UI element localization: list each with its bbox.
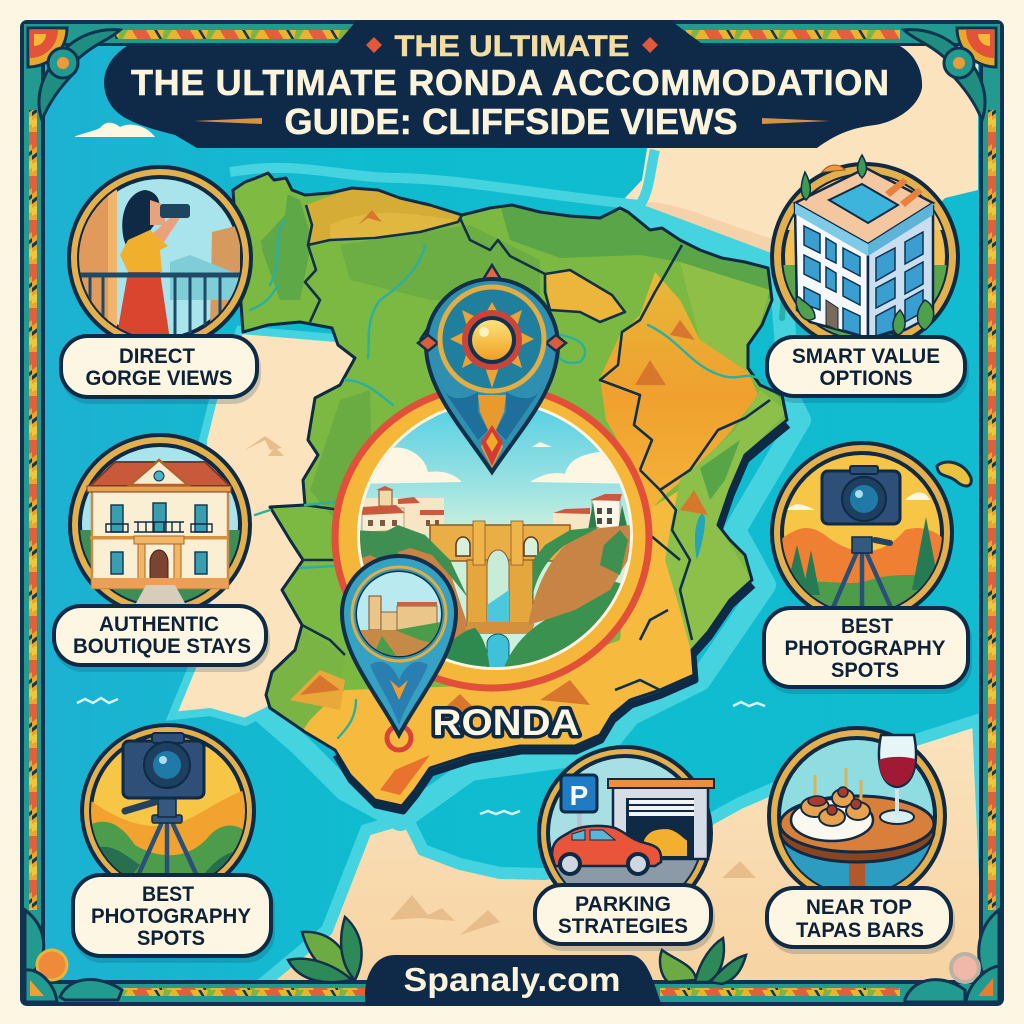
label: parking strategies: PARKING: [575, 893, 671, 916]
land: Portugal: [172, 330, 360, 722]
feature: best photography spots left: [73, 725, 271, 956]
feature: smart value options: [767, 155, 965, 396]
land: France coast shading: [636, 202, 780, 272]
title line 1: THE ULTIMATE: [394, 30, 630, 63]
footer website pill: [365, 955, 662, 1006]
feature: best photography spots right: [764, 443, 968, 687]
internal region borders: [302, 205, 770, 690]
label: authentic boutique stays: BOUTIQUE STAYS: [73, 635, 251, 658]
label: best photography spots right: [764, 608, 968, 687]
icon: ronda pin: [342, 556, 456, 735]
label: near top tapas bars: TAPAS BARS: [796, 919, 924, 942]
icon: tapas and red wine: [769, 728, 945, 904]
icon: sun compass pin: [418, 265, 566, 472]
medallion rings: [335, 386, 649, 688]
top-left corner ornament: [28, 28, 120, 120]
bridge: [430, 521, 570, 670]
label: best photography spots left: SPOTS: [137, 927, 205, 950]
icon: target ring: [387, 726, 411, 750]
top sea glow: [230, 150, 655, 205]
lake: [695, 514, 705, 560]
leaves at bottom: [288, 917, 746, 984]
label: best photography spots left: [73, 875, 271, 956]
sand hills: [245, 436, 756, 935]
label: best photography spots left: BEST: [142, 883, 194, 906]
icon: camera on tripod, orange hills: [772, 443, 952, 623]
bottom-right corner ornament: [905, 910, 999, 1002]
spain land: [234, 175, 786, 804]
town left: [362, 486, 444, 534]
icon: camera on tripod, green hills: [80, 723, 256, 873]
island: [937, 462, 971, 486]
spain outline: [233, 173, 787, 806]
icon: parking garage and cars: P: [570, 780, 588, 811]
label: authentic boutique stays: [54, 606, 266, 665]
label: direct gorge views: DIRECT: [119, 345, 195, 368]
diamonds: [366, 37, 658, 53]
land: France: [625, 46, 978, 300]
feature: parking strategies: [535, 747, 714, 944]
title line 2: THE ULTIMATE RONDA ACCOMMODATION: [131, 62, 889, 103]
icon: boutique villa: [70, 435, 250, 615]
label: best photography spots right: BEST: [841, 615, 893, 638]
label: best photography spots right: SPOTS: [831, 659, 899, 682]
icon: parking garage and cars: [537, 745, 715, 886]
label: near top tapas bars: NEAR TOP: [806, 896, 912, 919]
ronda label: RONDA: [432, 702, 580, 743]
terrain peaks: [300, 210, 708, 712]
central ronda medallion: [335, 386, 649, 688]
label: near top tapas bars: [767, 888, 951, 947]
title banner: [104, 20, 922, 148]
icon: woman photographing from balcony: [69, 167, 251, 349]
spain coast shadow: [336, 425, 788, 811]
label: best photography spots left: PHOTOGRAPHY: [91, 905, 251, 928]
label: best photography spots right: PHOTOGRAPHY: [784, 637, 946, 660]
label: direct gorge views: GORGE VIEWS: [86, 367, 232, 390]
cloud: [74, 123, 155, 137]
label: smart value options: SMART VALUE: [792, 345, 940, 368]
feature: near top tapas bars: [767, 728, 951, 947]
label: parking strategies: STRATEGIES: [558, 915, 688, 938]
banner divider accents: [194, 118, 830, 124]
label: authentic boutique stays: AUTHENTIC: [99, 613, 219, 636]
label: smart value options: OPTIONS: [820, 367, 912, 390]
label: smart value options: [767, 337, 965, 396]
land: North Africa: [255, 720, 990, 990]
title line 3: GUIDE: CLIFFSIDE VIEWS: [284, 101, 738, 142]
feature: authentic boutique stays: [54, 435, 266, 665]
icon: hotel with rooftop pool: [772, 155, 958, 350]
town right: [553, 494, 627, 530]
feature: direct gorge views: [61, 167, 257, 397]
gorge cliffs: [360, 530, 467, 640]
bottom-left corner ornament: [25, 910, 122, 1002]
waves: [77, 698, 765, 814]
label: direct gorge views: [61, 336, 257, 397]
ronda scene: [360, 410, 630, 667]
label: parking strategies: [535, 885, 711, 944]
top-right corner ornament: [904, 28, 996, 120]
rivers: [250, 220, 785, 738]
footer website pill: Spanaly.com: [404, 961, 620, 998]
spain coast glow: [262, 208, 800, 820]
